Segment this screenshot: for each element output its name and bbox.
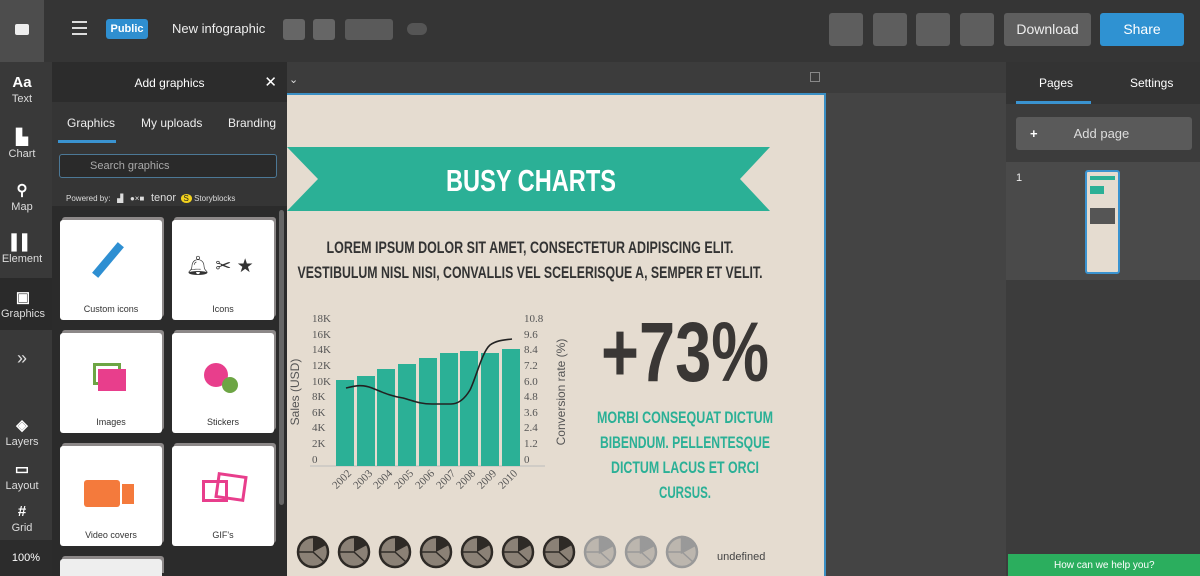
tabs: Graphics xyxy=(67,116,115,130)
add page button: + Add page xyxy=(1030,126,1129,141)
document title: New infographic xyxy=(172,21,265,36)
right panel xyxy=(1006,62,1200,576)
bar chart: 6K xyxy=(312,407,326,419)
left sidebar: Layers xyxy=(5,436,39,448)
page thumbnail row xyxy=(1006,162,1200,280)
bar chart: 8K xyxy=(312,391,326,403)
left sidebar: # xyxy=(18,503,26,520)
canvas header strip: ⌄ xyxy=(289,74,298,86)
bar chart: 2007 xyxy=(434,467,458,492)
infographic: undefined xyxy=(717,551,765,563)
bar chart: 2006 xyxy=(413,467,437,492)
bar chart: 4K xyxy=(312,422,326,434)
bar chart: 8.4 xyxy=(524,344,538,356)
graphics panel: Images xyxy=(96,417,126,427)
top bar xyxy=(0,0,1200,62)
graphics panel: Video covers xyxy=(85,530,137,540)
left sidebar: ▣ xyxy=(16,289,30,306)
bar chart: 16K xyxy=(312,329,331,341)
left sidebar: ◈ xyxy=(16,417,28,434)
public badge xyxy=(106,19,148,39)
left sidebar: Grid xyxy=(12,522,32,534)
title banner xyxy=(287,147,770,211)
panel header xyxy=(52,62,287,102)
bar chart: 1.2 xyxy=(524,438,538,450)
bar chart: 2K xyxy=(312,438,326,450)
bar chart: 0 xyxy=(524,454,530,466)
panel header: Add graphics xyxy=(134,76,205,90)
panel tabs: Pages xyxy=(1039,76,1073,90)
right toolbar buttons xyxy=(829,13,863,46)
left sidebar: Chart xyxy=(9,148,35,160)
search box xyxy=(59,154,277,178)
stat description: CURSUS. xyxy=(659,483,711,502)
public badge: Public xyxy=(110,23,144,35)
tabs xyxy=(52,102,287,206)
cards: Custom icons xyxy=(84,304,138,314)
tabs: My uploads xyxy=(141,116,202,130)
graphics panel: 🔔︎ ✂ ★ xyxy=(186,256,254,277)
left sidebar: Layout xyxy=(5,480,39,492)
bar chart: 3.6 xyxy=(524,407,538,419)
help button xyxy=(1008,554,1200,576)
panel tabs xyxy=(1006,62,1200,104)
big stat: +73% xyxy=(601,305,769,399)
bar chart: 2002 xyxy=(330,468,354,492)
left sidebar: ▌▌ xyxy=(11,234,33,251)
title banner: BUSY CHARTS xyxy=(446,163,616,198)
tool buttons xyxy=(283,19,305,40)
bar chart: 2.4 xyxy=(524,422,538,434)
left sidebar: Text xyxy=(12,93,32,105)
bar chart: 2003 xyxy=(351,467,375,492)
bar chart: 2008 xyxy=(454,467,478,492)
powered by: Powered by: ▟ ●×■ tenor S Storyblocks xyxy=(66,192,235,204)
scrollbar xyxy=(279,210,284,505)
graphics panel: Stickers xyxy=(207,417,239,427)
bar chart: 14K xyxy=(312,344,331,356)
download button: Download xyxy=(1016,21,1079,37)
panel tabs: Settings xyxy=(1130,76,1173,90)
bar chart: 9.6 xyxy=(524,329,538,341)
cards xyxy=(60,220,162,320)
add page button xyxy=(1016,117,1192,150)
help button: How can we help you? xyxy=(1054,560,1155,571)
bar chart: Conversion rate (%) xyxy=(554,339,568,445)
bar chart: Sales (USD) xyxy=(288,359,302,425)
left sidebar: Map xyxy=(11,201,33,213)
bar chart: 2004 xyxy=(371,467,395,492)
download button xyxy=(1004,13,1091,46)
graphics panel xyxy=(52,62,287,576)
bar chart: 4.8 xyxy=(524,391,538,403)
bar chart xyxy=(288,313,568,492)
bar chart: 7.2 xyxy=(524,360,538,372)
graphics panel: GIF's xyxy=(212,530,234,540)
bar chart: 2010 xyxy=(496,467,520,492)
bar chart: 2009 xyxy=(475,467,499,492)
page thumbnail row: 1 xyxy=(1016,172,1022,184)
left sidebar: Graphics xyxy=(1,308,45,320)
panel header: ✕ xyxy=(264,74,277,91)
bar chart: 0 xyxy=(312,454,318,466)
bar chart: 10.8 xyxy=(524,313,544,325)
graphics panel: Icons xyxy=(212,304,234,314)
share button: Share xyxy=(1123,21,1161,37)
left sidebar: ⚲ xyxy=(16,182,28,199)
left sidebar: ▙ xyxy=(16,129,28,146)
logo box xyxy=(0,0,44,62)
canvas header strip xyxy=(287,62,1006,93)
bar chart: 10K xyxy=(312,376,331,388)
left sidebar: Aa xyxy=(12,74,32,91)
bar chart: 6.0 xyxy=(524,376,538,388)
bar chart: 2005 xyxy=(392,467,416,492)
left sidebar: 100% xyxy=(12,552,40,564)
stat description xyxy=(597,408,773,502)
pictogram row xyxy=(298,537,697,567)
left sidebar: ▭ xyxy=(15,461,29,478)
bar chart: 18K xyxy=(312,313,331,325)
left sidebar xyxy=(0,62,52,576)
share button xyxy=(1100,13,1184,46)
bar chart: 12K xyxy=(312,360,331,372)
subtitle xyxy=(298,238,762,282)
infographic xyxy=(287,93,826,576)
search box: Search graphics xyxy=(90,160,170,172)
stat description: DICTUM LACUS ET ORCI xyxy=(611,458,759,477)
left sidebar: » xyxy=(17,348,27,368)
tabs: Branding xyxy=(228,116,276,130)
menu icon xyxy=(72,21,87,35)
left sidebar: Element xyxy=(2,253,42,265)
